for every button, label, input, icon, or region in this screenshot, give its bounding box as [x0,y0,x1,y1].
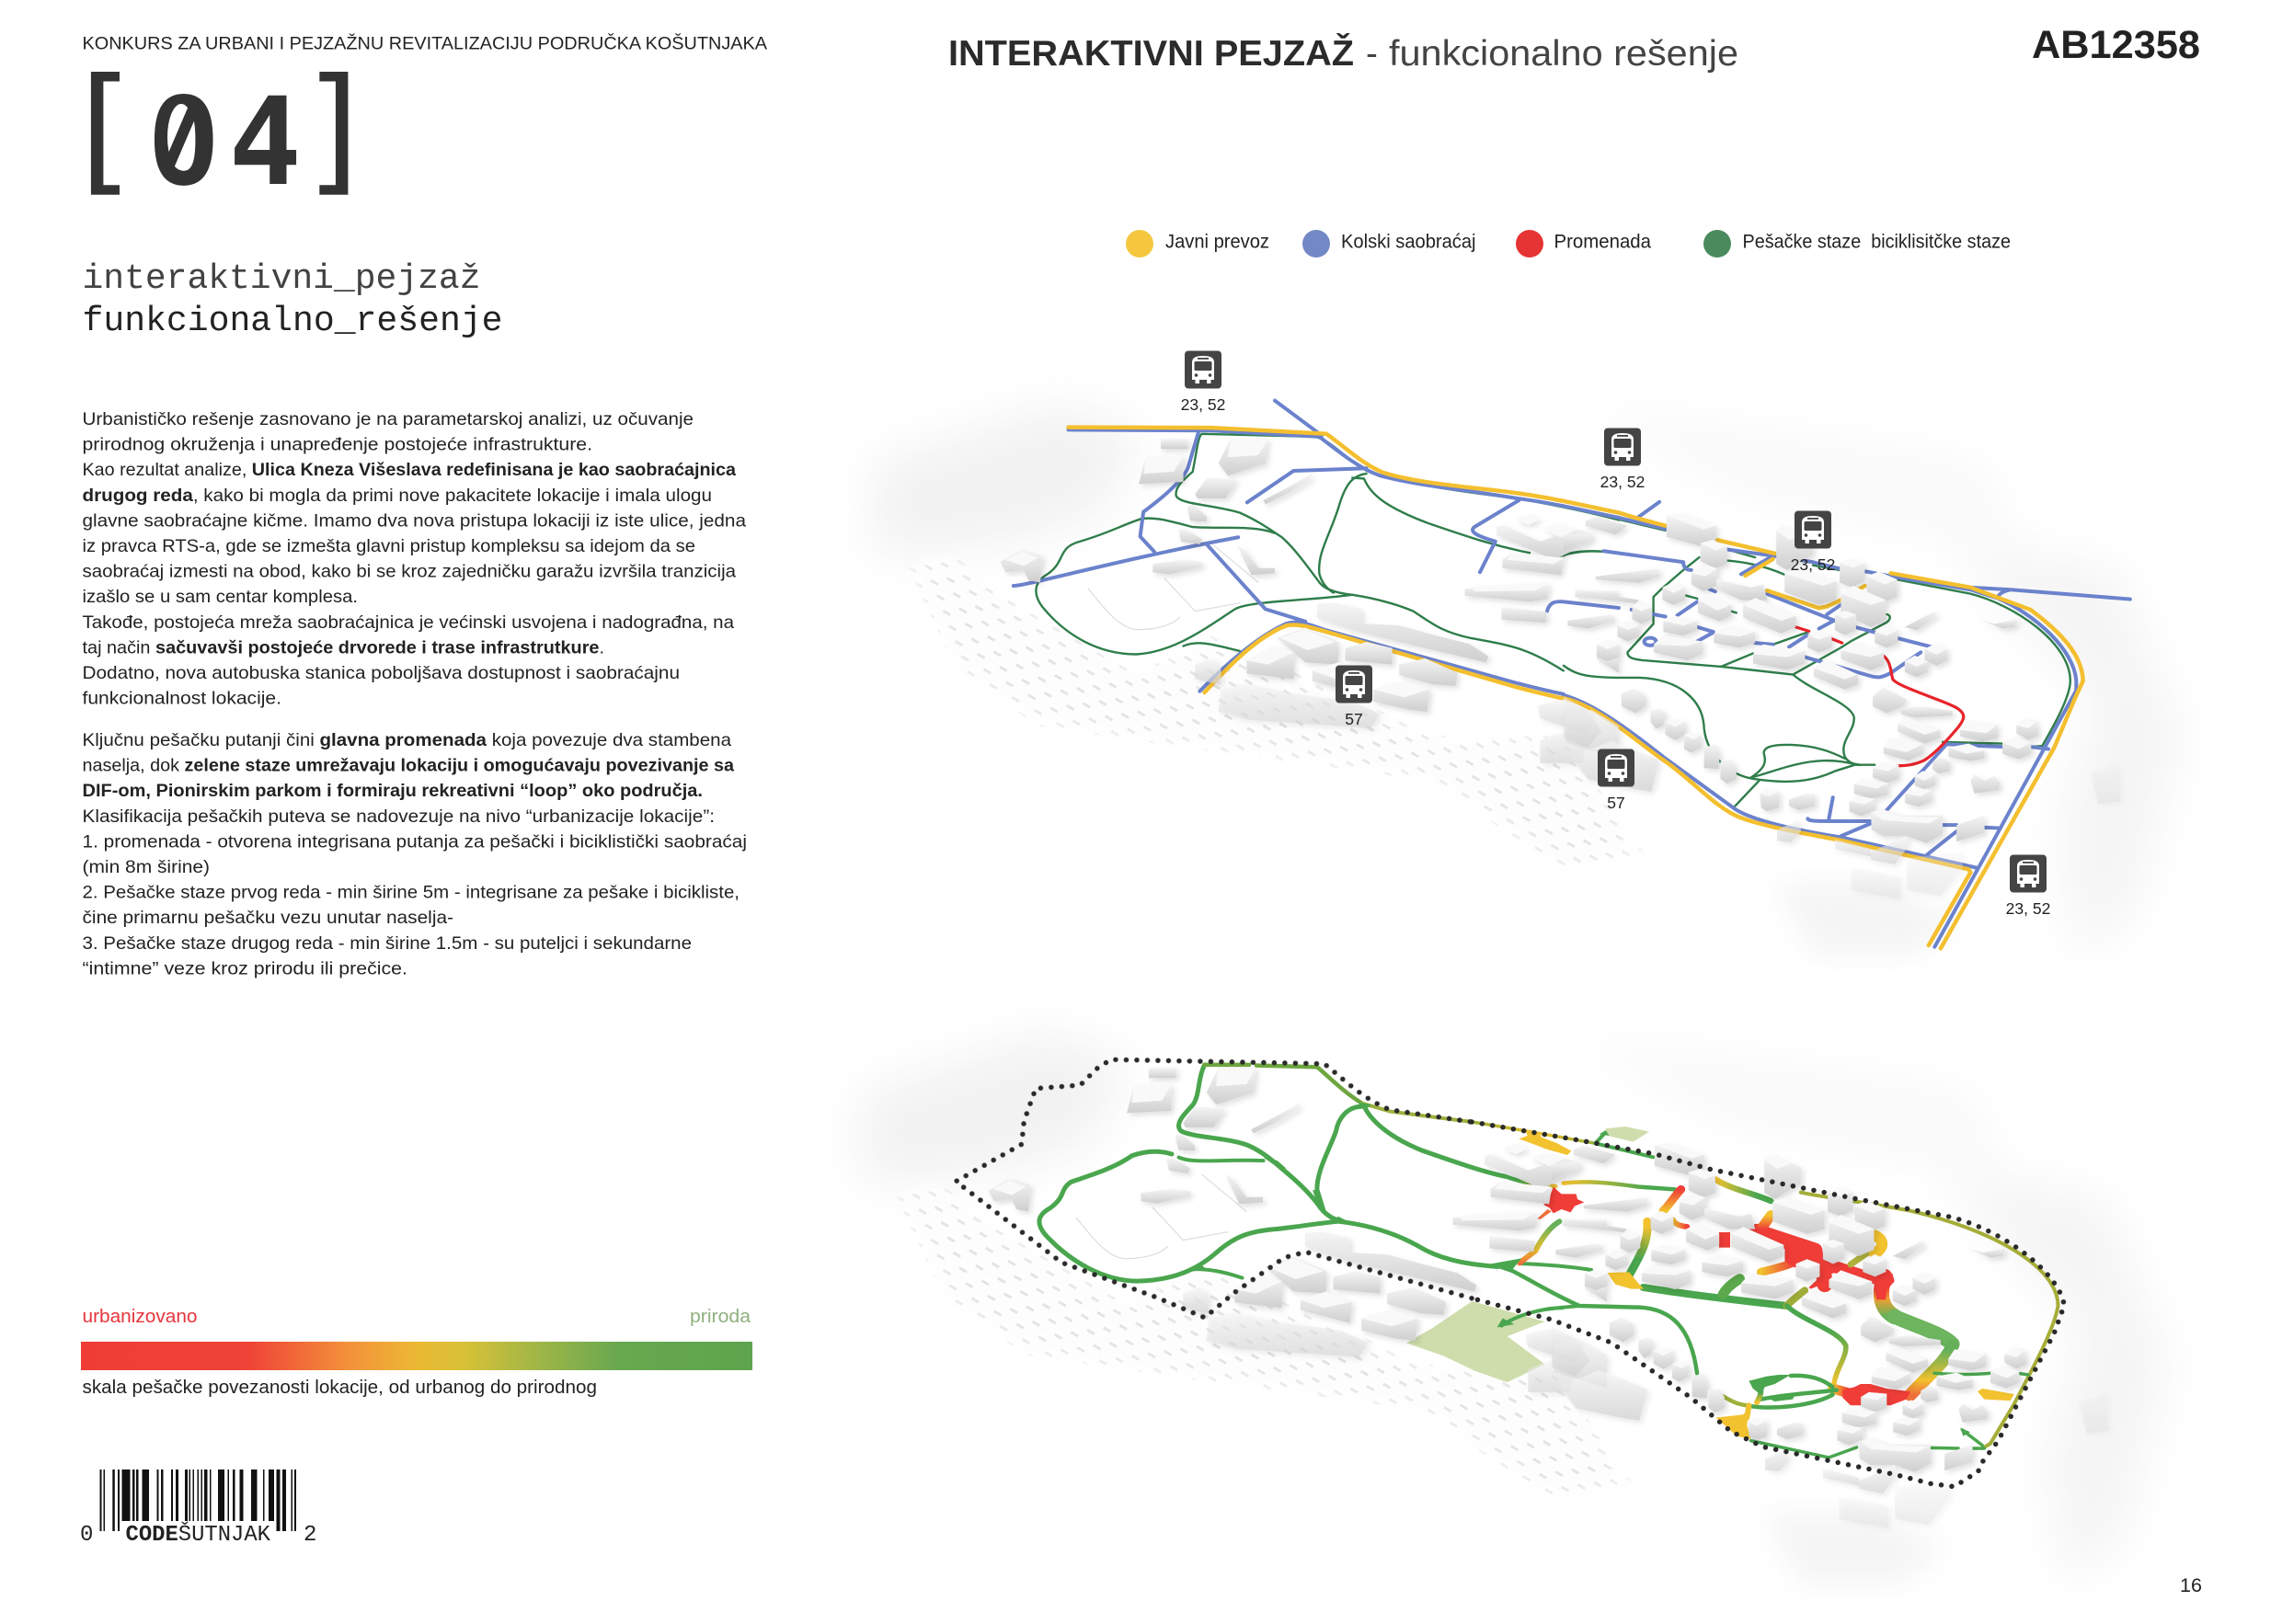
plaza: green wedge [1767,1395,1795,1401]
text block: first description: Takođe, postojeća mreža saobraćajnica je većinski usvojena i nadograđna, na [83,612,734,633]
chapter number in brackets: [ [60,50,143,210]
bus stop 23, 52 centre: 23, 52 [1791,555,1835,574]
legend: public transport: Javni prevoz [1165,232,1269,252]
text block: first description: Urbanističko rešenje zasnovano je na parametarskoj analizi, uz očuvanje [83,409,694,429]
project code: AB12358 [2032,23,2200,67]
map: pedestrian connectivity [862,1034,2168,1585]
plaza: central red [1784,1241,1849,1289]
arrow heads [1600,1130,1610,1136]
text block: pedestrian paths description: (min 8m širine) [83,857,210,877]
path junction wedges [1186,1102,1371,1273]
chapter subtitle: interaktivni_pejzaž [83,259,480,299]
text block: first description: funkcionalnost lokacije. [83,689,281,709]
barcode code text: CODEŠUTNJAK [125,1521,271,1548]
text block: pedestrian paths description: DIF-om, Pionirskim parkom i formiraju rekreativni “loop” oko područja. [83,781,703,801]
stadium outline [1076,1174,1246,1259]
text block: first description: prirodnog okruženja i unapređenje postojeće infrastrukture. [83,435,592,455]
plaza: western yellow [1607,1272,1644,1289]
terrain base [862,1034,2168,1585]
bus stop 23, 52 north: 23, 52 [1600,473,1645,491]
barcode digit left: 0 [80,1523,93,1548]
map legend [1126,230,2011,257]
path to park with arrow [1497,1308,1564,1328]
buildings [1001,439,2120,899]
plaza: small red strip [1719,1232,1730,1248]
text block: pedestrian paths description: naselja, dok zelene staze umrežavaju lokaciju i omogućavaju povezivanje sa [83,756,734,776]
barcode digit right: 2 [304,1523,316,1548]
chapter subtitle [83,259,502,341]
bus stop 23, 52 north-west: 23, 52 [1181,395,1225,414]
text block: pedestrian paths description: čine primarnu pešačku vezu unutar naselja- [83,908,453,928]
scale label: urban: urbanizovano [83,1307,197,1327]
chapter number in brackets: 04 [147,72,302,213]
terrain base [874,405,2180,956]
scale caption: skala pešačke povezanosti lokacije, od urbanog do prirodnog [83,1378,597,1398]
text block: pedestrian paths description [83,730,747,978]
scale legend [81,1307,752,1398]
plaza: south-western yellow [1715,1410,1751,1439]
legend: promenade [1516,230,1651,257]
text block: pedestrian paths description: 2. Pešačke staze prvog reda - min širine 5m - integrisane za pešake i bicikliste, [83,883,740,903]
text block: first description: Dodatno, nova autobuska stanica poboljšava dostupnost i saobraćajnu [83,663,680,683]
text block: pedestrian paths description: Klasifikacija pešačkih puteva se nadovezuje na nivo “urbanizacije lokacije”: [83,806,715,827]
red connector [1538,1209,1552,1219]
bus stop 23, 52 centre [1791,511,1835,574]
bus stop 57 west: 57 [1345,710,1363,728]
chapter number in brackets: ] [296,50,379,210]
text block: first description: izašlo se u sam centar komplesa. [83,587,358,607]
main title: INTERAKTIVNI PEJZAŽ [948,33,1354,74]
buildings [989,1068,2108,1528]
legend: public transport [1126,230,1269,257]
main title: - [1366,34,1378,74]
bus stop 57 west [1336,666,1372,728]
plaza: green blob [1749,1375,1791,1395]
gradient bar [81,1342,752,1370]
text block: first description: drugog reda , kako bi mogla da primi nove pakacitete lokacije i imala ulogu [83,486,712,506]
legend: car traffic: Kolski saobraćaj [1341,232,1475,252]
promenade [1795,627,1964,766]
stadium outline [1088,545,1258,630]
text block: pedestrian paths description: Ključnu pešačku putanji čini glavna promenada koja povezuje dva stambena [83,730,731,750]
scale label: nature: priroda [690,1307,751,1327]
text block: pedestrian paths description: “intimne” veze kroz prirodu ili prečice. [83,958,407,978]
competition heading: KONKURS ZA URBANI I PEJZAŽNU REVITALIZACIJU PODRUČKA KOŠUTNJAKA [83,33,767,53]
plaza: eastern yellow [1978,1389,2014,1401]
legend: car traffic [1302,230,1475,257]
bus stop 23, 52 north [1600,429,1645,491]
plaza: south-eastern red [1873,1274,1895,1299]
chapter number in brackets [60,50,379,213]
legend: promenade: Promenada [1554,232,1651,252]
car traffic roads [1014,401,2130,947]
chapter subtitle: funkcionalno_rešenje [83,302,502,341]
plaza: red star square [1543,1187,1584,1213]
dotted site boundary [956,1059,2064,1487]
text block: pedestrian paths description: 3. Pešačke staze drugog reda - min širine 1.5m - su puteljci i sekundarne [83,933,692,954]
main title: funkcionalno rešenje [1389,34,1738,74]
main title [948,33,1738,74]
map: traffic network [874,351,2180,956]
plaza: southern red [1842,1384,1910,1405]
urban plazas and squares [1487,1130,2014,1439]
green fields [1406,1127,1649,1382]
connectivity paths: eastern part [1472,1122,2058,1458]
text block: first description: taj način sačuvavši postojeće drvorede i trase infrastrutkure . [83,637,604,658]
bus stop 23, 52 east [2006,855,2050,918]
text block: first description: glavne saobraćajne kičme. Imamo dva nova pristupa lokaciji iz iste ulice, jedna [83,510,746,531]
barcode [80,1470,316,1548]
text block: first description [83,409,746,709]
text block: first description: saobraćaj izmesti na obod, kako bi se kroz zajedničku garažu izvršila tranzicija [83,562,736,582]
text block: pedestrian paths description: 1. promenada - otvorena integrisana putanja za pešački i biciklistički saobraćaj [83,831,747,852]
legend: pedestrian and bicycle paths [1703,230,2011,257]
barcode bars [99,1470,296,1531]
text block: first description: iz pravca RTS-a, gde se izmešta glavni pristup kompleksu sa idejom da se [83,536,695,556]
bus stop 23, 52 north-west [1181,351,1225,414]
page number: 16 [2180,1575,2202,1596]
bus stop 57 centre [1598,749,1634,812]
junction star [1487,1258,1521,1271]
legend: pedestrian and bicycle paths: Pešačke staze biciklisitčke staze [1742,232,2011,252]
green pedestrian paths [1036,434,2070,806]
bus stop 57 centre: 57 [1607,794,1625,812]
text block: first description: Kao rezultat analize, Ulica Kneza Višeslava redefinisana je kao saobraćajnica [83,460,736,480]
plaza: northern yellow [1519,1130,1571,1155]
connectivity paths: western part [1039,1065,1505,1281]
public transport routes [1069,428,2083,948]
bus stop 23, 52 east: 23, 52 [2006,899,2050,918]
